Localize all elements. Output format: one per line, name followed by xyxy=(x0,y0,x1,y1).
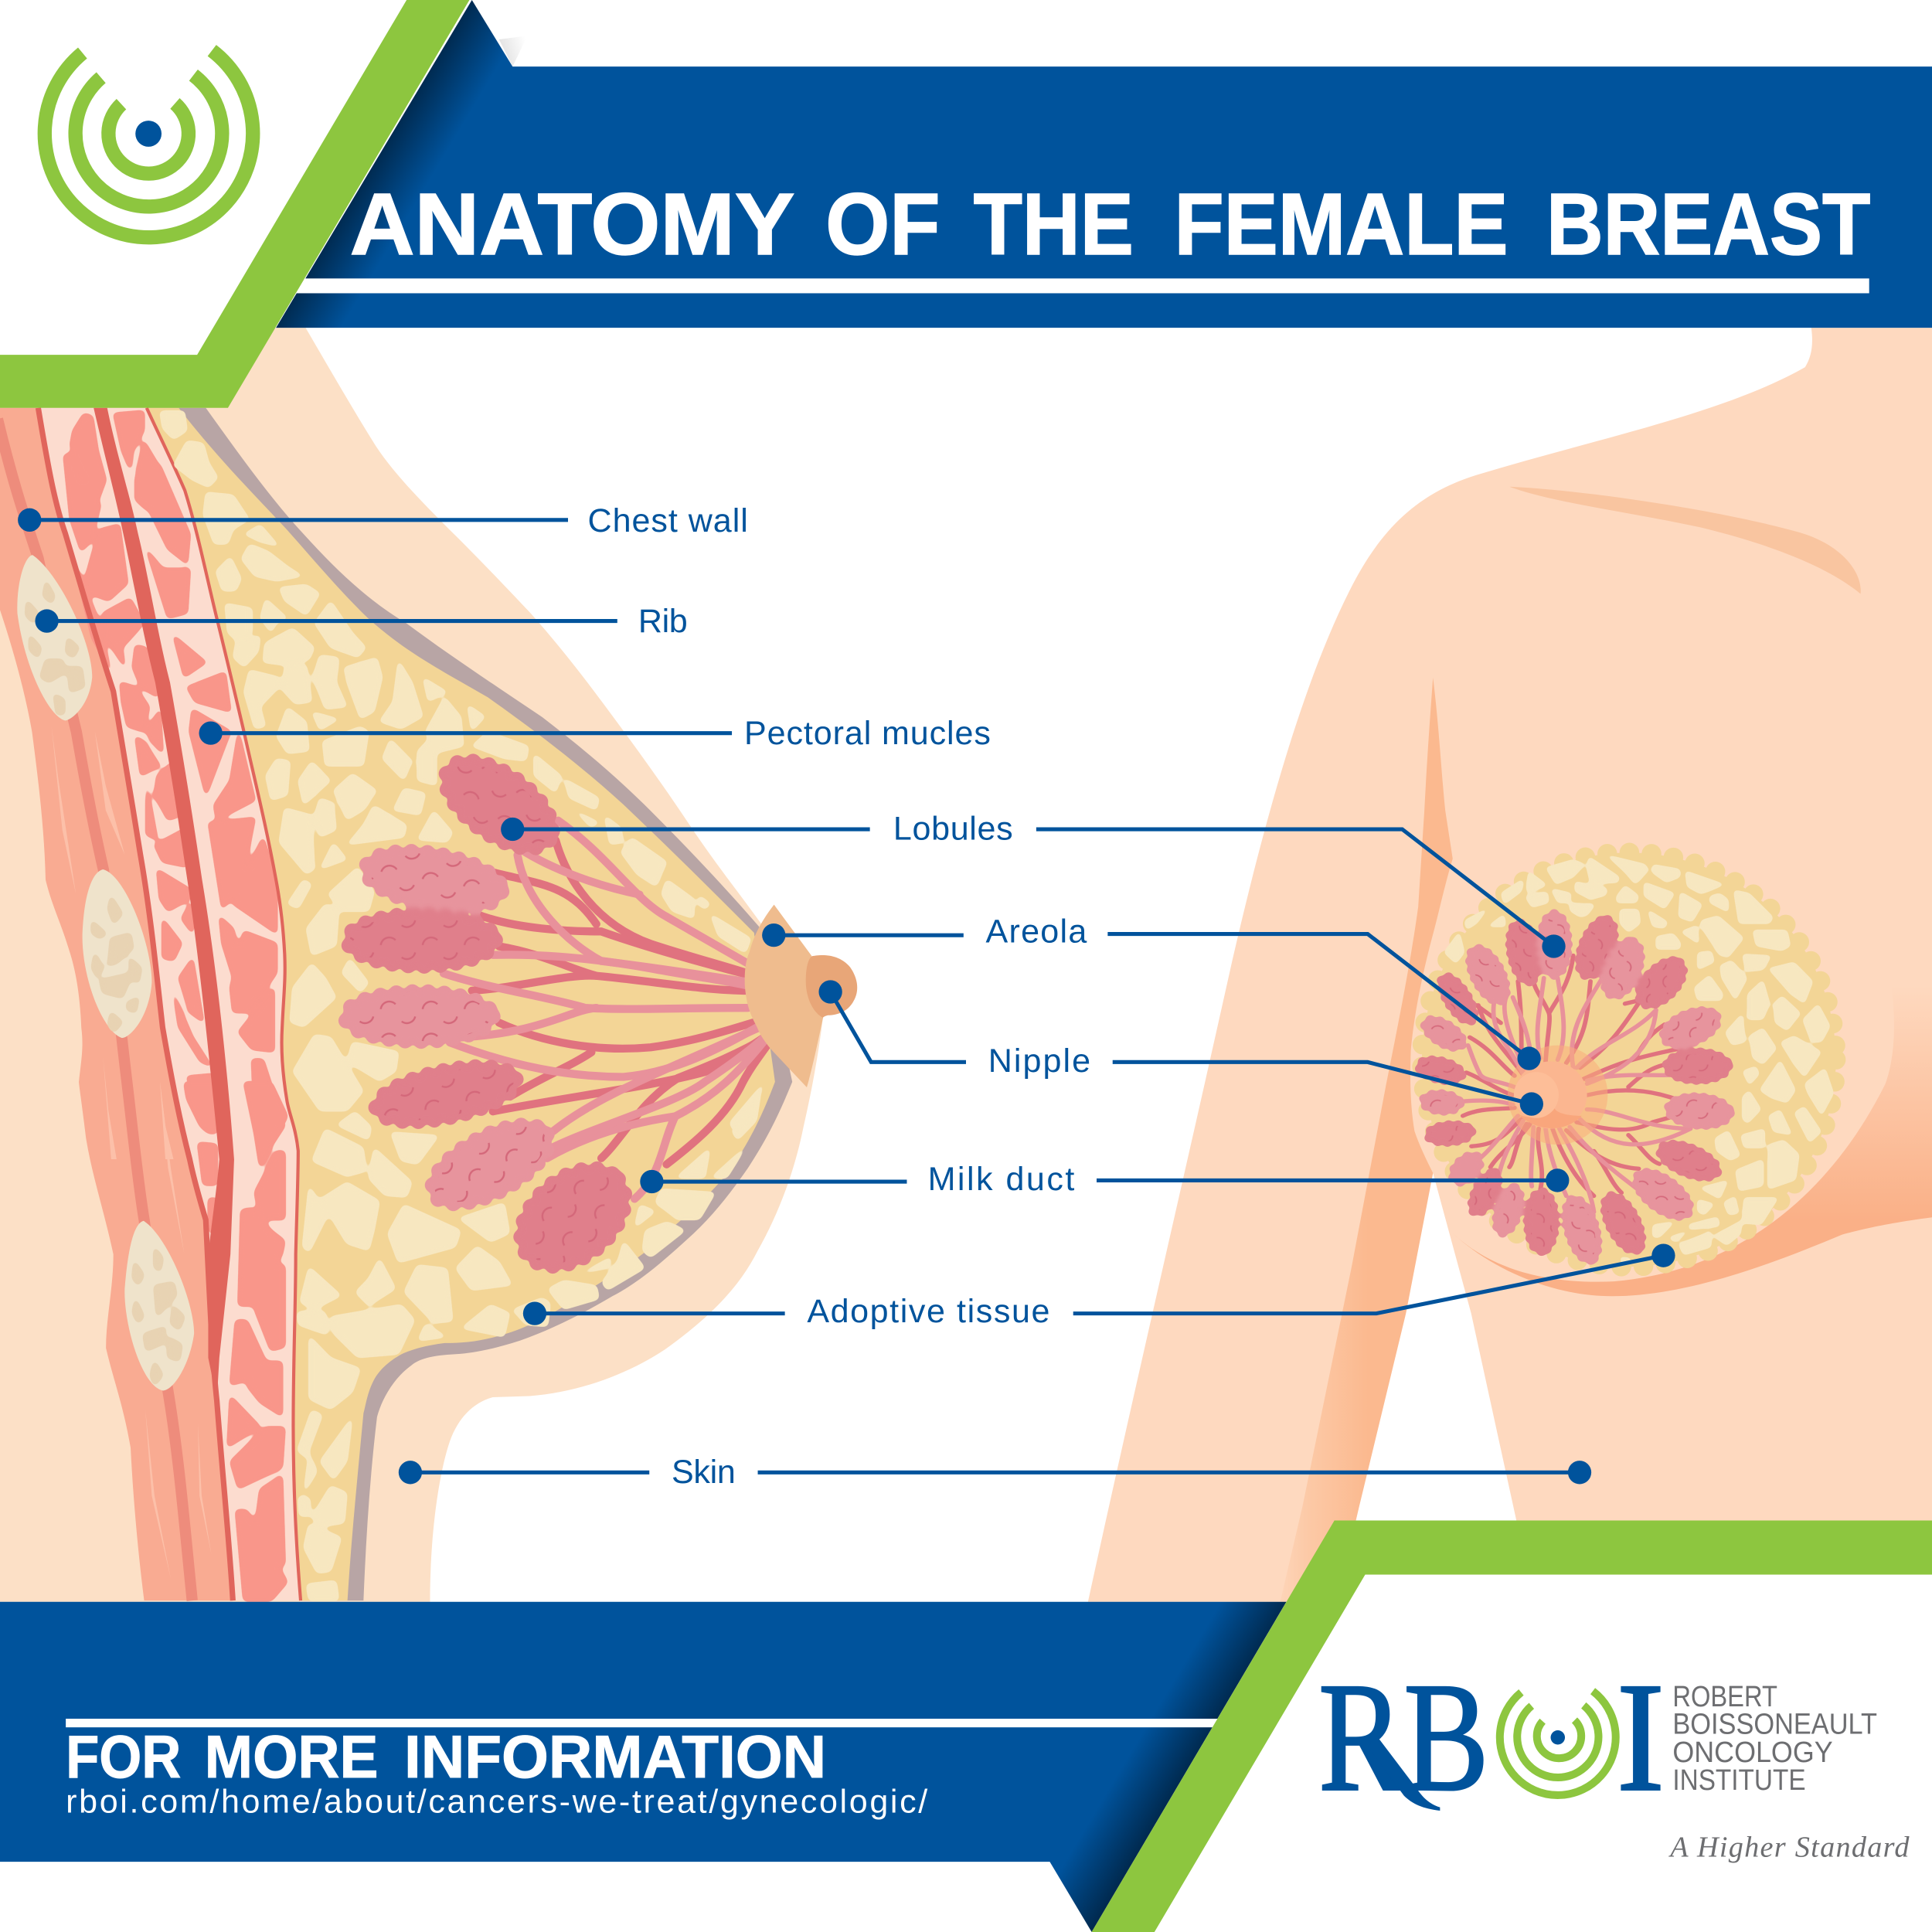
callout: nipple: Nipple xyxy=(988,1043,1090,1080)
callout: skin: Skin xyxy=(672,1454,736,1491)
logo letter I: I xyxy=(1617,1651,1665,1824)
callout: adoptive tissue: Adoptive tissue xyxy=(807,1293,1049,1330)
torso and arm skin xyxy=(1088,328,1932,1602)
footer banner xyxy=(0,1602,1287,1932)
fatty tissue, yellow xyxy=(147,408,775,1601)
callout: areola: Areola xyxy=(986,913,1087,951)
footer heading: MORE xyxy=(205,1723,378,1791)
organisation name: INSTITUTE xyxy=(1672,1764,1806,1797)
shoulder crease xyxy=(1509,487,1861,594)
callout: lobules: Lobules xyxy=(893,811,1013,848)
left cross-section illustration xyxy=(0,328,857,1602)
areola, side view xyxy=(745,905,823,1087)
rib bones xyxy=(17,555,194,1390)
footer logo xyxy=(1318,1651,1910,1864)
icon: RBOI rings logo, top left xyxy=(45,50,253,237)
callout: rib: Rib xyxy=(638,603,688,640)
green chevron, bottom right xyxy=(1092,1520,1932,1932)
skin layer, grey outline xyxy=(147,408,792,1600)
callout: milk duct xyxy=(640,1161,1569,1198)
callout: pectoral muscles: Pectoral mucles xyxy=(744,715,991,752)
nipple, side view xyxy=(806,955,857,1018)
callout: lobules xyxy=(501,811,1566,958)
callout: skin xyxy=(399,1454,1591,1491)
callout: milk duct: Milk duct xyxy=(928,1161,1074,1198)
footer url: rboi.com/home/about/cancers-we-treat/gynecologic/ xyxy=(66,1783,927,1820)
lobules, front view xyxy=(1417,913,1731,1264)
callout: rib xyxy=(35,603,688,640)
icon: rings in footer logo xyxy=(1500,1691,1616,1795)
milk ducts, front view xyxy=(1463,956,1691,1212)
organisation name: BOISSONEAULT xyxy=(1672,1707,1877,1740)
milk ducts, side view xyxy=(444,821,770,1199)
pectoral muscle band xyxy=(38,408,301,1601)
title: OF xyxy=(825,175,940,273)
under breast shadow xyxy=(1451,897,1932,1296)
title: THE xyxy=(974,175,1134,273)
header banner xyxy=(276,0,1932,328)
footer heading xyxy=(66,1723,826,1791)
areola and nipple, front view xyxy=(1508,1046,1607,1145)
callout: areola xyxy=(762,913,1541,1070)
callout: pectoral muscles xyxy=(199,715,991,752)
lobules, side view xyxy=(345,744,644,1286)
footer heading: FOR xyxy=(66,1723,181,1791)
organisation name xyxy=(1672,1680,1877,1797)
arm shadow stripe xyxy=(1281,678,1453,1602)
title: FEMALE xyxy=(1174,175,1509,273)
title underline xyxy=(296,278,1869,293)
logo tail flourish xyxy=(1368,1736,1440,1811)
white logo corner panel xyxy=(1155,1575,1932,1932)
organisation name: ROBERT xyxy=(1672,1680,1777,1713)
footer rule xyxy=(66,1719,1236,1727)
title xyxy=(350,175,1870,273)
fatty tissue disc, front view xyxy=(1422,852,1836,1267)
callout: chest wall xyxy=(18,502,748,539)
organisation name: ONCOLOGY xyxy=(1672,1736,1833,1769)
title: BREAST xyxy=(1546,175,1870,273)
callout: nipple xyxy=(818,980,1543,1116)
callout: chest wall: Chest wall xyxy=(588,502,748,539)
title: ANATOMY xyxy=(350,175,794,273)
right torso illustration xyxy=(1088,328,1932,1602)
chest wall muscle xyxy=(0,408,233,1600)
green chevron, top left xyxy=(0,0,469,408)
skin, side view xyxy=(0,328,823,1602)
logo letters RB: RB xyxy=(1318,1651,1489,1824)
tagline: A Higher Standard xyxy=(1668,1832,1910,1864)
footer heading: INFORMATION xyxy=(404,1723,826,1791)
callout: adoptive tissue xyxy=(523,1244,1675,1330)
